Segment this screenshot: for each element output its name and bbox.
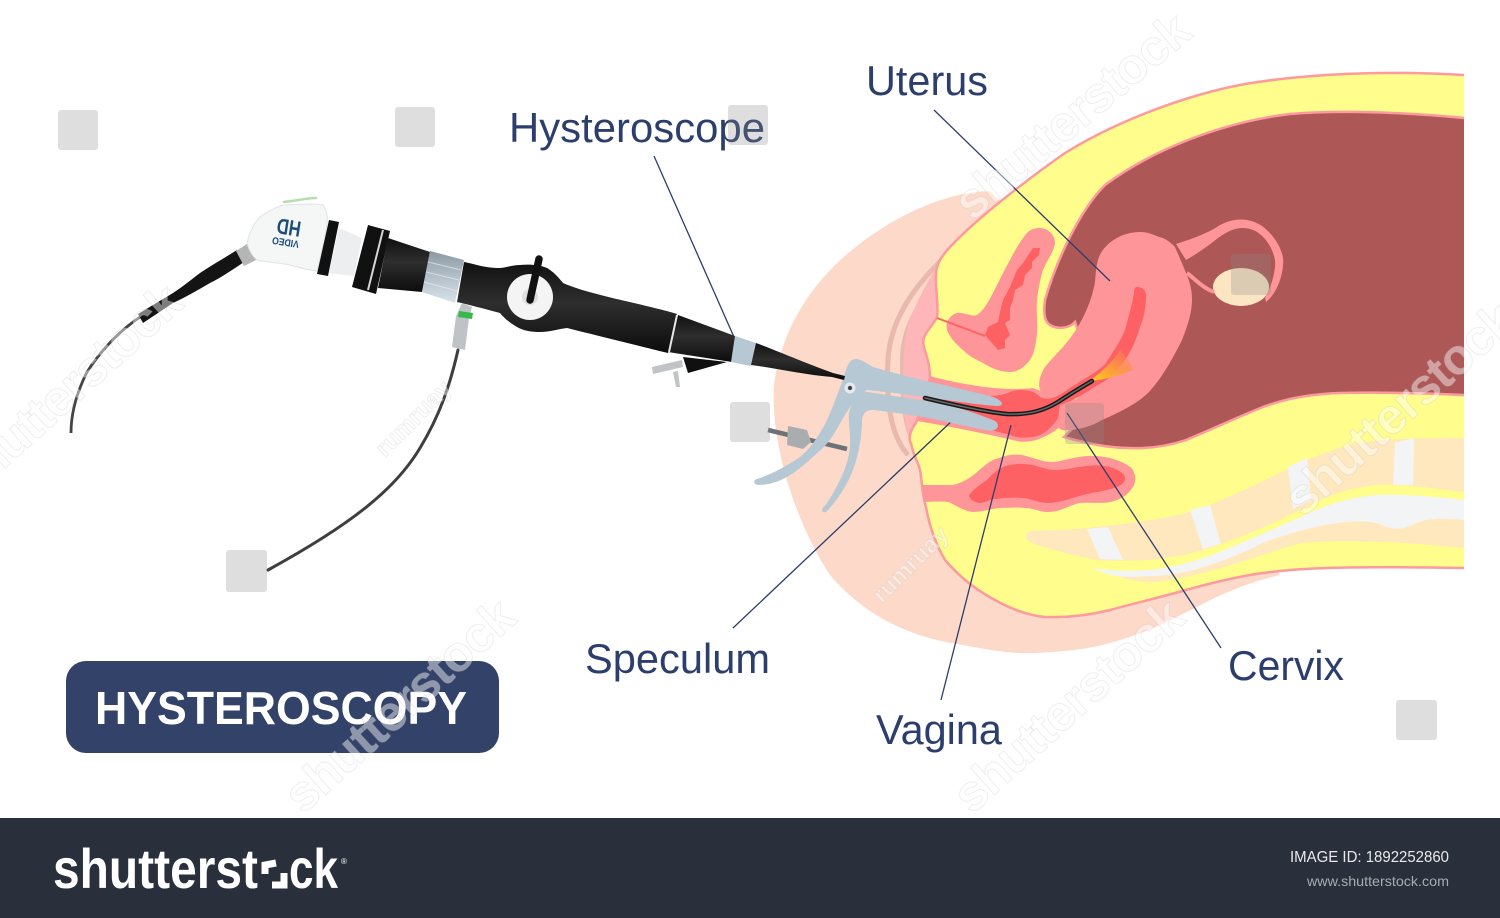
lower spine peach bbox=[1120, 519, 1464, 582]
watermark squares bbox=[58, 105, 1437, 740]
rectum bbox=[922, 455, 1135, 512]
scope neck bbox=[378, 238, 430, 292]
left video cable bbox=[71, 317, 140, 433]
title badge: HYSTEROSCOPY bbox=[95, 682, 467, 734]
vaginal and uterine lumen bbox=[925, 287, 1146, 438]
white coupler bbox=[329, 228, 362, 276]
speculum bbox=[754, 359, 1002, 512]
label: Vagina: Vagina bbox=[876, 706, 1003, 753]
scope forward section bbox=[668, 315, 735, 362]
footer logo: ck bbox=[289, 837, 339, 900]
vaginal wall bbox=[917, 376, 1078, 442]
video cable strain relief bbox=[138, 250, 244, 323]
silver side port bbox=[652, 360, 683, 387]
speculum rod and nut bbox=[768, 426, 847, 449]
spine peach segments bbox=[1026, 438, 1464, 561]
scope shaft inside the body bbox=[925, 381, 1092, 414]
footer bar bbox=[0, 818, 1500, 918]
skin silhouette bbox=[774, 191, 1280, 653]
callout lines bbox=[654, 110, 1221, 700]
grey band on scope bbox=[731, 336, 756, 366]
uterus bbox=[1039, 232, 1192, 431]
section seam bbox=[669, 315, 677, 352]
light glow at hysteroscope tip bbox=[1090, 350, 1133, 381]
black focus ring bbox=[352, 225, 390, 294]
label: Uterus: Uterus bbox=[866, 57, 988, 104]
footer logo: shutterst bbox=[53, 837, 258, 900]
watermarks: shutterstock bbox=[942, 587, 1195, 823]
bladder bbox=[937, 228, 1055, 372]
speculum lower blade and rear handle bbox=[822, 392, 998, 512]
fallopian tube bbox=[1176, 219, 1283, 302]
HD video mark: VIDEO bbox=[271, 234, 300, 249]
abdominal cavity, dark red bbox=[1044, 112, 1464, 448]
anatomy cross-section bbox=[774, 73, 1464, 653]
outer labia folds bbox=[888, 257, 945, 455]
speculum pivot screw bbox=[844, 382, 856, 394]
abdominal fat, yellow bbox=[910, 73, 1464, 617]
scope main body bbox=[457, 262, 677, 353]
silver grip band bbox=[422, 251, 464, 303]
ovary bbox=[1213, 268, 1269, 306]
watermarks: shutterstock bbox=[943, 1, 1201, 230]
footer url: www.shutterstock.com bbox=[1306, 873, 1449, 889]
footer image id: IMAGE ID: 1892252860 bbox=[1290, 849, 1449, 866]
watermarks: rumruay bbox=[370, 375, 458, 462]
tapered cone bbox=[751, 343, 845, 380]
title badge bbox=[66, 661, 499, 753]
hysteroscope instrument bbox=[71, 198, 1092, 570]
label: Speculum: Speculum bbox=[585, 635, 770, 682]
light cable bbox=[268, 350, 458, 570]
vertebral discs bbox=[1087, 438, 1414, 560]
side port triangle bbox=[683, 357, 727, 373]
HD video mark: HD bbox=[275, 213, 303, 242]
spinal canal bbox=[1092, 495, 1464, 577]
green band and light connector bbox=[452, 303, 473, 350]
footer registered mark: ® bbox=[341, 857, 347, 866]
label: Hysteroscope: Hysteroscope bbox=[509, 104, 765, 151]
silver camera connector bbox=[236, 242, 256, 266]
HD video mark bbox=[271, 213, 303, 249]
watermarks: shutterstock bbox=[273, 587, 526, 823]
label: Cervix: Cervix bbox=[1228, 642, 1344, 689]
speculum upper blade and front handle bbox=[754, 359, 1002, 485]
camera head bbox=[247, 198, 327, 271]
hub dial bbox=[507, 259, 553, 320]
watermarks: rumruay bbox=[867, 521, 955, 608]
black coupling ring bbox=[317, 220, 339, 276]
